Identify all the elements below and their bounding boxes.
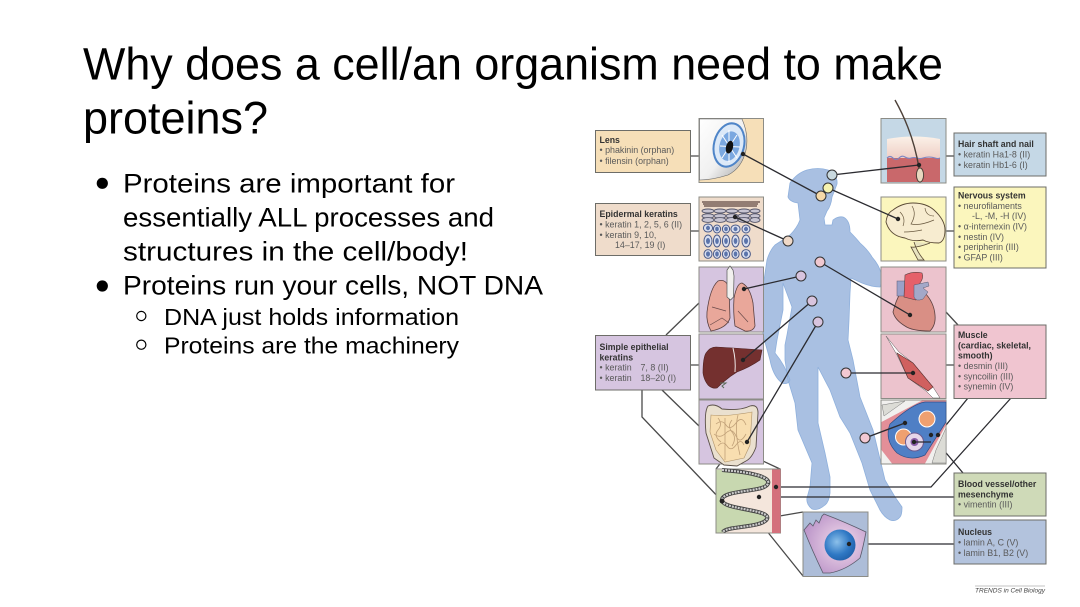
label: muscle: • synemin (IV) bbox=[958, 382, 1013, 392]
panel: eye bbox=[699, 118, 764, 182]
human body silhouette bbox=[763, 168, 902, 521]
label: lens: • filensin (orphan) bbox=[600, 156, 669, 166]
label: simple epithelial keratins: 18–20 (I) bbox=[640, 373, 676, 383]
label: nervous system: • GFAP (III) bbox=[958, 252, 1003, 262]
label: nucleus: • lamin A, C (V) bbox=[958, 538, 1018, 548]
label: nervous system bbox=[954, 187, 1046, 268]
label: epidermal keratins: • keratin 9, 10, bbox=[600, 230, 656, 240]
panel: hair bbox=[881, 100, 946, 183]
label: muscle: • syncoilin (III) bbox=[958, 372, 1013, 382]
bullet list bbox=[97, 168, 543, 358]
bullet: proteins are important: Proteins are important for bbox=[123, 168, 455, 198]
label: blood vessel/other mesenchyme: mesenchyme bbox=[958, 490, 1014, 500]
label: lens bbox=[596, 130, 690, 172]
panel: brain bbox=[881, 197, 946, 261]
label: epidermal keratins: 14–17, 19 (I) bbox=[615, 240, 665, 250]
bullet: proteins are important: structures in the cell/body! bbox=[123, 236, 468, 266]
panel: lungs bbox=[699, 266, 764, 332]
connector lines between labels and panels bbox=[642, 156, 1011, 576]
label: hair shaft and nail: Hair shaft and nail bbox=[958, 139, 1034, 149]
panel: heart bbox=[881, 267, 946, 332]
label: epidermal keratins: • keratin 1, 2, 5, 6 (II) bbox=[600, 220, 682, 230]
label: blood vessel/other mesenchyme: Blood vessel/other bbox=[958, 479, 1037, 489]
label: muscle: (cardiac, skeletal, bbox=[958, 340, 1031, 350]
label: nervous system: • α-internexin (IV) bbox=[958, 222, 1027, 232]
source credit: TRENDS in Cell Biology bbox=[975, 588, 1046, 594]
label: nervous system: Nervous system bbox=[958, 190, 1026, 200]
label: blood vessel/other mesenchyme bbox=[954, 473, 1046, 516]
label: simple epithelial keratins: 7, 8 (II) bbox=[640, 362, 669, 372]
label: nucleus bbox=[954, 520, 1046, 564]
label: muscle: Muscle bbox=[958, 330, 988, 340]
label: blood vessel/other mesenchyme: • vimentin (III) bbox=[958, 500, 1012, 510]
pointer lines from body to panels bbox=[720, 152, 940, 546]
panel: cell with nucleus bbox=[803, 512, 868, 576]
label: simple epithelial keratins: • keratin bbox=[600, 362, 632, 372]
label: nervous system: -L, -M, -H (IV) bbox=[972, 211, 1026, 221]
label: muscle bbox=[954, 325, 1046, 398]
label: muscle: • desmin (III) bbox=[958, 361, 1008, 371]
sub-bullet: proteins are machinery: Proteins are the machinery bbox=[164, 332, 460, 358]
label: lens: • phakinin (orphan) bbox=[600, 145, 674, 155]
panel: intestinal villi bbox=[716, 469, 780, 533]
label: simple epithelial keratins: • keratin bbox=[600, 373, 632, 383]
panel: epidermis cells bbox=[699, 197, 764, 261]
bullet: proteins are important: essentially ALL processes and bbox=[123, 202, 494, 232]
label: hair shaft and nail: • keratin Ha1-8 (II) bbox=[958, 150, 1030, 160]
bullet: proteins run your cells: Proteins run your cells, NOT DNA bbox=[123, 270, 543, 300]
title bbox=[83, 38, 943, 144]
title: Why does a cell/an organism need to make bbox=[83, 38, 943, 90]
title: proteins? bbox=[83, 92, 268, 144]
label: hair shaft and nail: • keratin Hb1-6 (I) bbox=[958, 160, 1028, 170]
label: simple epithelial keratins: keratins bbox=[600, 352, 633, 362]
body location markers bbox=[783, 170, 870, 443]
label: simple epithelial keratins bbox=[596, 336, 690, 390]
panel: skeletal muscle bbox=[881, 334, 946, 398]
intermediate filament diagram bbox=[596, 100, 1046, 594]
label: nervous system: • peripherin (III) bbox=[958, 242, 1019, 252]
label: epidermal keratins: Epidermal keratins bbox=[600, 209, 678, 219]
panel: intestine bbox=[699, 400, 764, 466]
label: muscle: smooth) bbox=[958, 350, 993, 360]
label: nucleus: Nucleus bbox=[958, 527, 992, 537]
label: epidermal keratins bbox=[596, 204, 690, 256]
label: simple epithelial keratins: Simple epithelial bbox=[600, 342, 669, 352]
label: nucleus: • lamin B1, B2 (V) bbox=[958, 548, 1028, 558]
panel: liver bbox=[699, 334, 764, 399]
label: hair shaft and nail bbox=[954, 133, 1046, 176]
label: nervous system: • neurofilaments bbox=[958, 201, 1022, 211]
sub-bullet: DNA holds information: DNA just holds information bbox=[164, 304, 459, 330]
panel: blood vessel cross-section bbox=[881, 400, 946, 464]
label: nervous system: • nestin (IV) bbox=[958, 232, 1004, 242]
bullet: proteins are important bbox=[97, 168, 494, 266]
label: lens: Lens bbox=[600, 135, 620, 145]
